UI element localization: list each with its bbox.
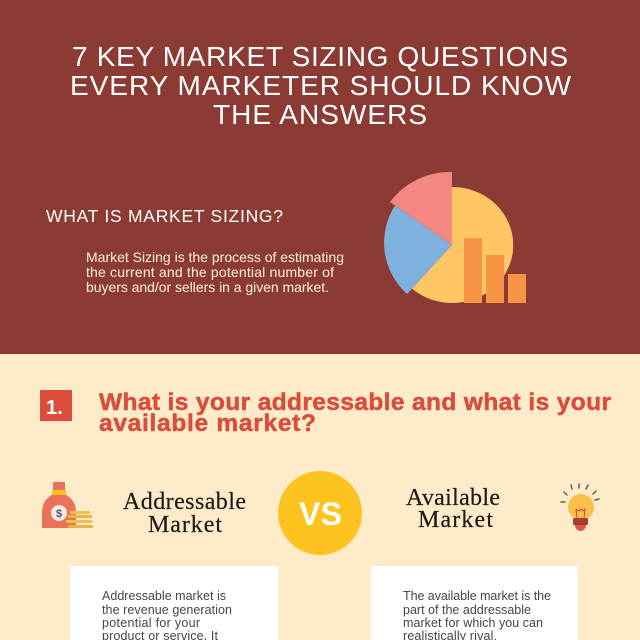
card: addressable market [70, 566, 278, 640]
heading: addressable market: Market [148, 512, 222, 538]
text block: market sizing definition: the current and the potential number of [86, 264, 334, 280]
title: 7 KEY MARKET SIZING QUESTIONS [72, 41, 568, 72]
title: EVERY MARKETER SHOULD KNOW [70, 70, 572, 101]
heading: available market: Available [406, 485, 500, 511]
heading: addressable market: Addressable [123, 489, 246, 515]
vs badge: VS [299, 496, 342, 532]
heading: addressable market [123, 489, 246, 538]
number badge: 1 [40, 390, 72, 421]
title: THE ANSWERS [213, 99, 427, 130]
number badge: 1: 1. [46, 397, 63, 419]
heading: what is market sizing: WHAT IS MARKET SIZING? [46, 206, 283, 226]
card: addressable market: Addressable market is [102, 589, 226, 603]
text block: market sizing definition: Market Sizing is the process of estimating [86, 249, 344, 265]
card: addressable market: potential for your [102, 616, 200, 630]
card: available market [371, 566, 578, 640]
panel: question section background [0, 354, 640, 640]
heading: available market: Market [418, 507, 493, 533]
heading: available market [406, 485, 500, 533]
icon: money bag with coins: $ [56, 508, 62, 520]
icon: light bulb [561, 484, 599, 531]
title [70, 41, 572, 130]
card: available market: market for which you can [403, 616, 543, 630]
card: available market: part of the addressable [403, 603, 531, 617]
text block: market sizing definition: buyers and/or sellers in a given market. [86, 279, 329, 295]
vs badge [278, 471, 362, 555]
question heading: available market? [99, 410, 316, 437]
question heading: What is your addressable and what is your [99, 389, 611, 416]
icon: money bag with coins [42, 482, 93, 528]
question heading [99, 389, 611, 437]
chart icon: pie with bars [384, 172, 526, 303]
card: available market: The available market is the [403, 589, 551, 603]
text block: market sizing definition [86, 249, 344, 295]
card: addressable market: the revenue generation [102, 603, 232, 617]
panel: intro header background [0, 0, 640, 354]
